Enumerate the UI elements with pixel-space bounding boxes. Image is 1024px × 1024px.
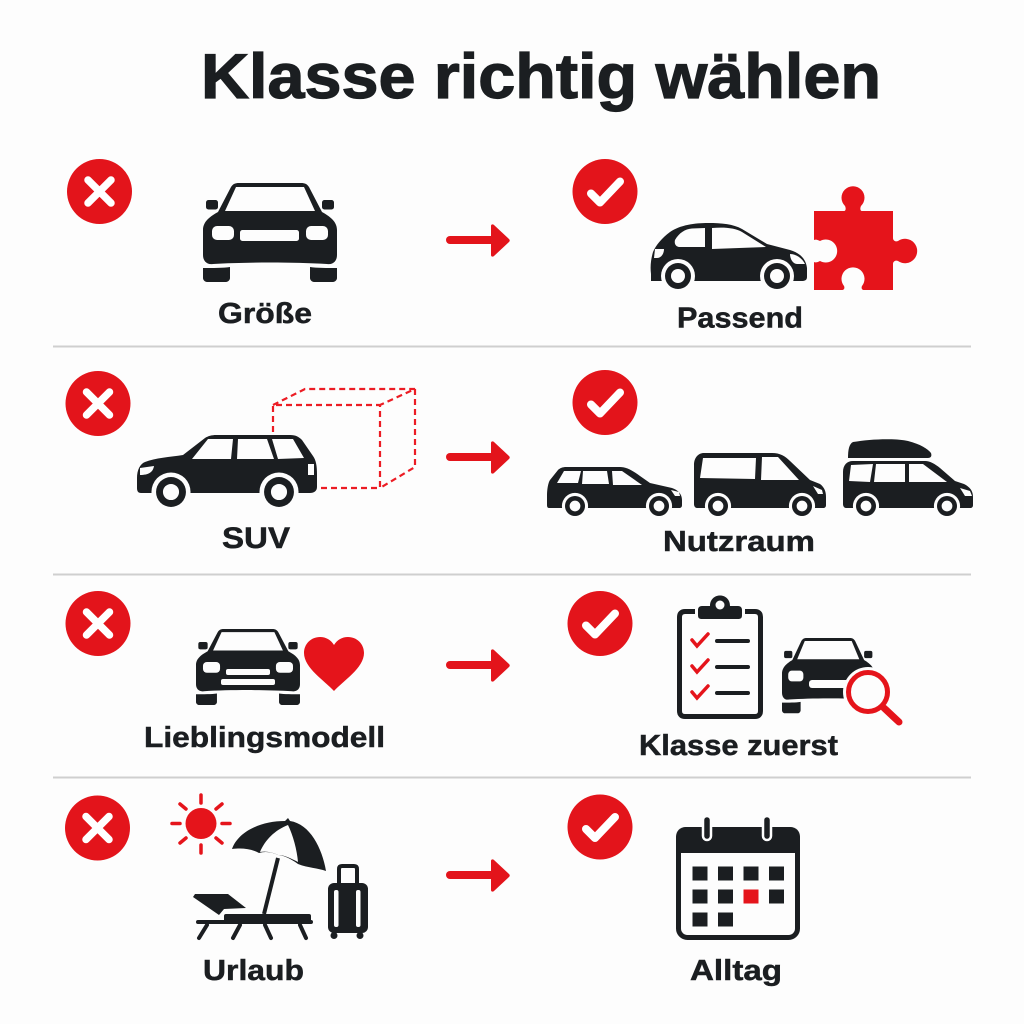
- arrow: [450, 441, 510, 474]
- icon: calendar: [676, 816, 800, 938]
- label: Größe: Größe: [218, 298, 312, 330]
- icon: beach umbrella and lounger: [193, 818, 326, 938]
- icon: sun: [172, 795, 230, 853]
- icon: SUV: [137, 435, 317, 512]
- label: Klasse zuerst: Klasse zuerst: [639, 730, 838, 762]
- icon: suitcase: [328, 866, 368, 939]
- row 2: SUV to Nutzraum: [66, 370, 973, 558]
- icon: cross: [67, 159, 132, 224]
- icon: cross: [66, 371, 130, 436]
- label: Nutzraum: Nutzraum: [663, 526, 815, 558]
- arrow: [450, 859, 510, 892]
- icon: car front: [196, 629, 300, 705]
- icon: van: [694, 453, 826, 519]
- row 3: Lieblingsmodell to Klasse zuerst: [66, 591, 899, 762]
- icon: check: [572, 159, 638, 224]
- icon: cross: [66, 591, 130, 656]
- icon: small car: [651, 223, 807, 293]
- icon: check: [572, 370, 638, 435]
- label: SUV: SUV: [222, 522, 290, 555]
- icon: checklist clipboard: [680, 596, 760, 716]
- label: Alltag: Alltag: [690, 955, 782, 987]
- title: Klasse richtig wählen: [201, 42, 881, 112]
- icon: large car front: [203, 183, 337, 282]
- arrow: [450, 224, 510, 257]
- icon: heart: [304, 637, 364, 691]
- icon: check: [568, 591, 632, 656]
- label: Lieblingsmodell: Lieblingsmodell: [144, 722, 385, 754]
- icon: check: [568, 794, 632, 860]
- label: Passend: Passend: [677, 302, 803, 334]
- icon: magnifier: [848, 672, 899, 722]
- icon: cross: [65, 796, 130, 860]
- icon: estate car: [547, 467, 682, 519]
- row 1: Größe to Passend: [67, 159, 917, 334]
- label: Urlaub: Urlaub: [203, 955, 304, 987]
- icon: car front small: [782, 638, 893, 718]
- row 4: Urlaub to Alltag: [65, 794, 800, 987]
- icon: puzzle piece: [814, 186, 917, 290]
- icon: van with roof box: [843, 439, 973, 519]
- arrow: [450, 649, 510, 682]
- icon: dashed cargo box: [273, 389, 415, 488]
